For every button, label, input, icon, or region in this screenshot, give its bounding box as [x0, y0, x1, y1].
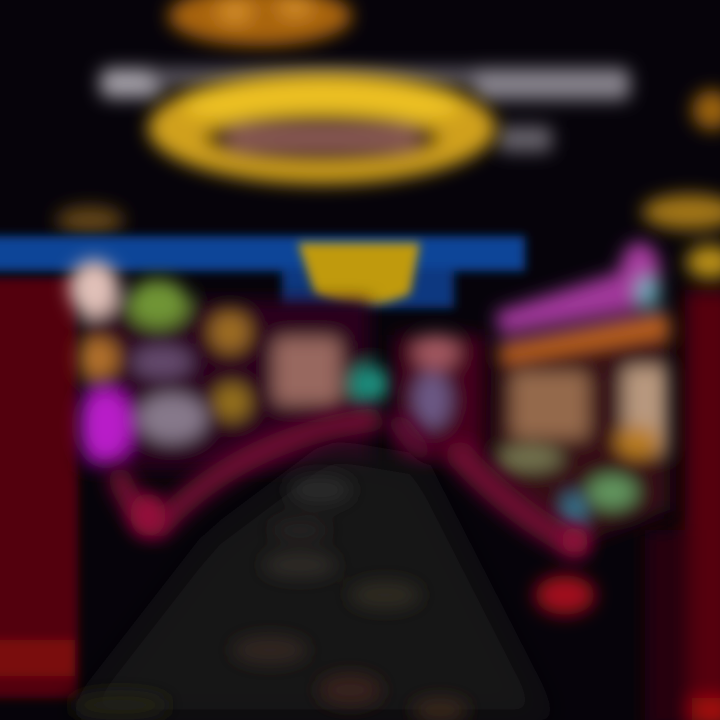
- yellow centre sign: [298, 243, 420, 305]
- red counter curves: [120, 420, 575, 545]
- blue header band: [0, 236, 525, 308]
- right centre machines: [395, 334, 485, 460]
- blurred heading text band: [100, 68, 630, 152]
- red stool: [130, 493, 595, 615]
- right wall: [645, 290, 720, 720]
- gold oval sign: [148, 72, 496, 184]
- right ceiling lamps: [56, 90, 720, 279]
- carpet floor: [70, 450, 550, 720]
- left machine row: [69, 260, 392, 470]
- right machine bank: [490, 242, 672, 545]
- left wall: [0, 278, 78, 698]
- carpet pattern: [70, 476, 468, 720]
- ceiling lamp: top gold: [168, 0, 352, 46]
